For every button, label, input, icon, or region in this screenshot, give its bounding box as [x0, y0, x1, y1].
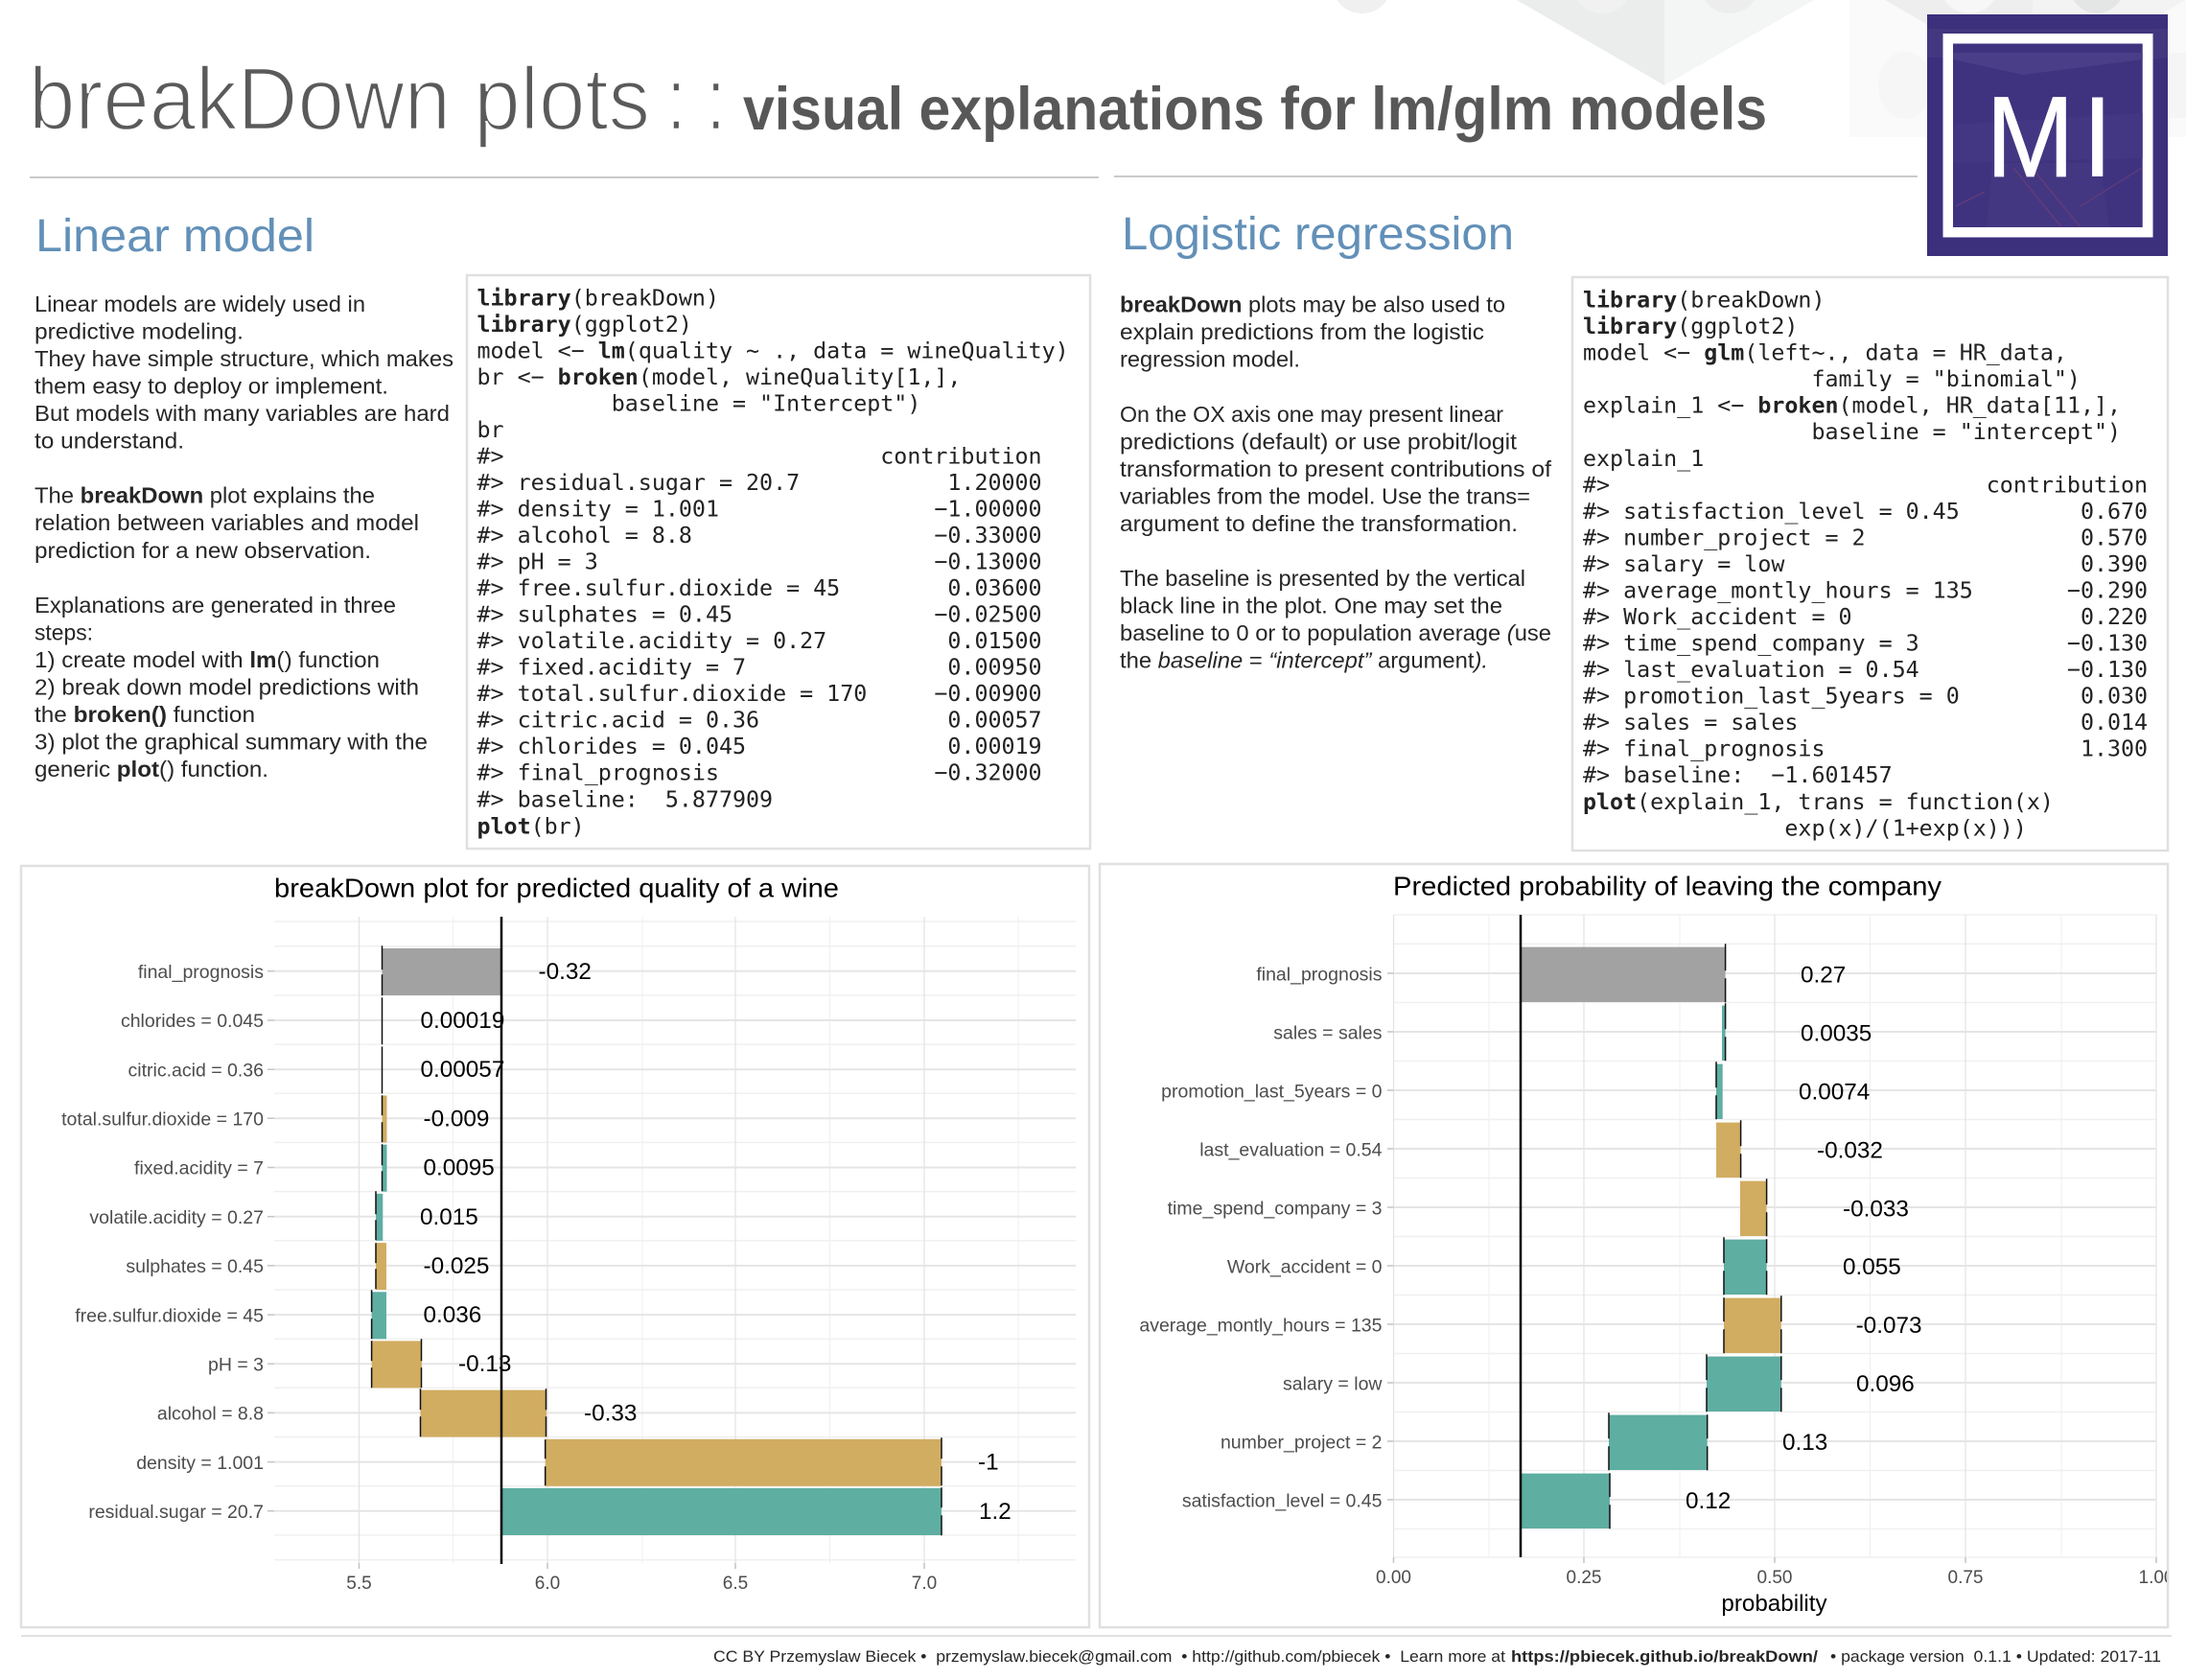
panel: linear model code: #> final_prognosis −0.32000	[477, 760, 1042, 786]
value labels: 0.096	[1856, 1371, 1915, 1397]
value labels: 0.12	[1686, 1488, 1731, 1514]
category labels: chlorides = 0.045	[121, 1011, 264, 1032]
value labels: 0.0095	[424, 1155, 495, 1181]
category labels: density = 1.001	[136, 1453, 264, 1474]
heading: Linear model: Linear model	[35, 211, 314, 262]
axis ticks	[267, 971, 924, 1569]
text block: logistic regression description: explain predictions from the logistic	[1120, 319, 1484, 344]
text block: logistic regression description: The baseline is presented by the vertical	[1120, 566, 1525, 591]
panel: linear model code: #> contribution	[477, 444, 1042, 470]
category labels: residual.sugar = 20.7	[88, 1502, 264, 1523]
value labels: 0.0035	[1801, 1020, 1872, 1047]
panel: linear model code: #> volatile.acidity = 0.27 0.01500	[477, 628, 1042, 654]
panel: linear model code: #> pH = 3 −0.13000	[477, 549, 1042, 575]
value labels: 0.0074	[1799, 1080, 1870, 1105]
x axis labels	[1377, 1571, 2167, 1583]
baseline	[500, 917, 502, 1564]
value labels: -1	[978, 1450, 999, 1475]
text block: logistic regression description: transformation to present contributions of	[1120, 456, 1552, 481]
category labels	[61, 962, 264, 1523]
text block: logistic regression description	[1120, 292, 1552, 672]
panel: linear model code: library(breakDown)	[477, 286, 719, 312]
category labels: time_spend_company = 3	[1168, 1199, 1383, 1220]
text block: linear model description	[35, 292, 453, 782]
value labels: 0.055	[1843, 1254, 1901, 1280]
text block: linear model description: They have simple structure, which makes	[35, 346, 453, 371]
title: visual explanations for lm/glm models	[743, 76, 1767, 143]
footer: CC BY Przemyslaw Biecek • przemyslaw.biecek@gmail.com • http://github.com/pbiecek • Learn more at	[713, 1647, 1505, 1666]
category labels: alcohol = 8.8	[157, 1404, 264, 1425]
value labels: 1.2	[979, 1499, 1012, 1525]
text block: logistic regression description: regression model.	[1120, 347, 1300, 372]
x axis labels: 7.0	[912, 1574, 937, 1594]
panel: logistic regression code: library(breakDown)	[1583, 288, 1825, 313]
x axis labels: 0.00	[1376, 1568, 1411, 1588]
title: breakDown plots	[29, 49, 650, 149]
panel: logistic regression code: #> contribution	[1583, 472, 2148, 498]
panel: logistic regression code: #> number_project = 2 0.570	[1583, 525, 2148, 550]
value labels: 0.27	[1801, 963, 1846, 988]
panel: linear model code	[467, 275, 1090, 849]
text block: linear model description: the broken() function	[35, 702, 255, 727]
text block: linear model description: predictive modeling.	[35, 318, 244, 343]
panel: logistic regression code	[1572, 277, 2168, 851]
panel: linear model code: plot(br)	[477, 813, 585, 840]
panel: logistic regression code: #> Work_accident = 0 0.220	[1583, 604, 2148, 630]
panel: linear model code: #> alcohol = 8.8 −0.33000	[477, 523, 1042, 548]
heading: Logistic regression: Logistic regression	[1122, 209, 1514, 260]
panel: logistic regression code: #> average_montly_hours = 135 −0.290	[1583, 577, 2148, 604]
chart title: Predicted probability of leaving the company	[1393, 871, 1942, 901]
value labels: -0.073	[1856, 1313, 1922, 1339]
panel: logistic regression code: family = "binomial")	[1583, 366, 2081, 392]
text block: linear model description: Explanations are generated in three	[35, 593, 396, 618]
x axis labels: 5.5	[346, 1574, 372, 1594]
x axis labels	[346, 1574, 937, 1594]
value labels: -0.33	[584, 1400, 637, 1427]
value labels	[420, 959, 1012, 1525]
text block: linear model description: them easy to deploy or implement.	[35, 374, 388, 399]
value labels: -0.033	[1843, 1197, 1909, 1222]
panel: linear model code: #> baseline: 5.877909	[477, 787, 773, 813]
category labels: citric.acid = 0.36	[128, 1060, 264, 1081]
text block: logistic regression description: black line in the plot. One may set the	[1120, 593, 1502, 618]
category labels: sulphates = 0.45	[126, 1256, 264, 1277]
background watermark	[1333, 0, 2186, 137]
text block: linear model description: The breakDown plot explains the	[35, 483, 375, 508]
category labels: total.sulfur.dioxide = 170	[61, 1108, 264, 1130]
panel: logistic regression code: #> satisfaction_level = 0.45 0.670	[1583, 499, 2148, 525]
text block: linear model description: generic plot() function.	[35, 757, 268, 782]
footer: • package version 0.1.1 • Updated: 2017-11	[1830, 1647, 2161, 1666]
category labels: fixed.acidity = 7	[134, 1158, 264, 1179]
value labels: 0.036	[424, 1302, 481, 1328]
text block: logistic regression description: On the OX axis one may present linear	[1120, 402, 1503, 427]
text block: linear model description: 1) create model with lm() function	[35, 647, 380, 672]
value labels: -0.025	[424, 1253, 489, 1279]
logo: MI	[1927, 14, 2168, 256]
bars	[1521, 944, 1781, 1528]
text block: logistic regression description: predictions (default) or use probit/logit	[1120, 429, 1518, 454]
footer rule	[21, 1635, 2172, 1637]
logo: MI: I	[2081, 73, 2113, 201]
panel: linear model code: br	[477, 417, 504, 443]
value labels: 0.00057	[420, 1057, 504, 1083]
panel: linear model code: model <− lm(quality ~ ., data = wineQuality)	[477, 338, 1069, 364]
panel: linear model code: #> total.sulfur.dioxide = 170 −0.00900	[477, 681, 1042, 707]
category labels: average_montly_hours = 135	[1139, 1316, 1383, 1337]
footer: https://pbiecek.github.io/breakDown/	[1511, 1647, 1818, 1666]
panel: logistic regression code: #> last_evaluation = 0.54 −0.130	[1583, 657, 2148, 683]
text block: logistic regression description: argument to define the transformation.	[1120, 511, 1518, 536]
title: : :	[666, 49, 726, 149]
x axis labels: 6.5	[723, 1574, 748, 1594]
category labels: Work_accident = 0	[1227, 1256, 1383, 1277]
category labels: final_prognosis	[1256, 965, 1383, 986]
text block: linear model description: 2) break down model predictions with	[35, 675, 419, 700]
panel: logistic regression code: explain_1	[1583, 446, 1704, 472]
text block: logistic regression description: breakDown plots may be also used to	[1120, 292, 1505, 316]
panel: logistic regression code: #> salary = low 0.390	[1583, 551, 2148, 577]
logo: MI: M	[1987, 73, 2075, 201]
category labels: number_project = 2	[1221, 1433, 1383, 1454]
value labels: 0.13	[1782, 1430, 1827, 1456]
axis title: probability	[1721, 1591, 1828, 1617]
panel: logistic regression code: #> promotion_last_5years = 0 0.030	[1583, 684, 2148, 710]
category labels: last_evaluation = 0.54	[1199, 1139, 1383, 1160]
value labels: -0.032	[1817, 1137, 1883, 1164]
x axis labels: 0.75	[1948, 1568, 1983, 1588]
value labels: -0.009	[424, 1107, 489, 1132]
panel: logistic regression code: explain_1 <− broken(model, HR_data[11,],	[1583, 393, 2121, 419]
panel: logistic regression code: baseline = "intercept")	[1583, 419, 2121, 445]
category labels: promotion_last_5years = 0	[1161, 1082, 1383, 1103]
panel: linear model code: #> citric.acid = 0.36 0.00057	[477, 708, 1042, 734]
panel: linear model code: library(ggplot2)	[477, 312, 692, 338]
category labels: final_prognosis	[138, 962, 264, 983]
x axis labels: 0.25	[1567, 1568, 1601, 1588]
value labels	[1686, 963, 1922, 1514]
bars	[372, 945, 942, 1535]
baseline	[1520, 915, 1522, 1557]
text block: logistic regression description: variables from the model. Use the trans=	[1120, 483, 1530, 508]
panel: linear model code: br <− broken(model, wineQuality[1,],	[477, 364, 961, 390]
category labels: free.sulfur.dioxide = 45	[75, 1305, 264, 1326]
panel: logistic regression code: #> sales = sales 0.014	[1583, 710, 2148, 735]
panel: logistic regression code: library(ggplot2)	[1583, 314, 1798, 339]
category labels: satisfaction_level = 0.45	[1182, 1490, 1383, 1511]
panel: logistic regression code: #> final_prognosis 1.300	[1583, 736, 2148, 762]
panel: probability of leaving chart	[1100, 864, 2174, 1627]
panel: linear model code: #> fixed.acidity = 7 0.00950	[477, 655, 1042, 681]
panel: linear model code: #> density = 1.001 −1.00000	[477, 497, 1042, 523]
x axis labels: 0.50	[1757, 1568, 1792, 1588]
value labels: 0.015	[420, 1204, 478, 1230]
chart title: breakDown plot for predicted quality of a wine	[274, 873, 839, 903]
category labels	[1139, 965, 1383, 1511]
value labels: -0.32	[539, 959, 592, 985]
text block: linear model description: Linear models are widely used in	[35, 292, 365, 316]
text block: linear model description: relation between variables and model	[35, 510, 419, 535]
panel: logistic regression code: plot(explain_1, trans = function(x)	[1583, 789, 2054, 815]
panel: linear model code: baseline = "Intercept")	[477, 391, 920, 417]
axis ticks	[1387, 973, 2156, 1563]
header rules	[30, 176, 1918, 177]
text block: linear model description: steps:	[35, 619, 93, 644]
panel: linear model code: #> sulphates = 0.45 −0.02500	[477, 602, 1042, 628]
panel: logistic regression code: model <− glm(left~., data = HR_data,	[1583, 340, 2067, 366]
panel: wine quality breakDown chart	[21, 866, 1089, 1627]
text block: linear model description: to understand.	[35, 428, 184, 453]
text block: linear model description: But models with many variables are hard	[35, 401, 450, 426]
x axis labels: 1.00	[2139, 1568, 2174, 1588]
panel: logistic regression code: exp(x)/(1+exp(x)))	[1583, 815, 2027, 841]
panel: logistic regression code: #> time_spend_company = 3 −0.130	[1583, 631, 2148, 657]
title	[29, 49, 1767, 149]
value labels: 0.00019	[420, 1008, 504, 1034]
value labels: -0.13	[458, 1351, 511, 1377]
footer	[713, 1647, 2161, 1666]
x axis labels: 6.0	[535, 1574, 560, 1594]
panel: linear model code: #> chlorides = 0.045 0.00019	[477, 734, 1042, 759]
text block: linear model description: 3) plot the graphical summary with the	[35, 730, 428, 755]
category labels: sales = sales	[1273, 1022, 1383, 1043]
text block: logistic regression description: baseline to 0 or to population average (use	[1120, 620, 1551, 645]
text block: linear model description: prediction for a new observation.	[35, 538, 371, 563]
category labels: salary = low	[1283, 1373, 1383, 1394]
category labels: volatile.acidity = 0.27	[89, 1207, 264, 1228]
category labels: pH = 3	[208, 1354, 264, 1375]
panel: linear model code: #> residual.sugar = 20.7 1.20000	[477, 470, 1042, 496]
panel: logistic regression code: #> baseline: −1.601457	[1583, 762, 1893, 788]
panel: linear model code: #> free.sulfur.dioxide = 45 0.03600	[477, 575, 1042, 601]
text block: logistic regression description: the baseline = “intercept” argument).	[1120, 647, 1488, 672]
